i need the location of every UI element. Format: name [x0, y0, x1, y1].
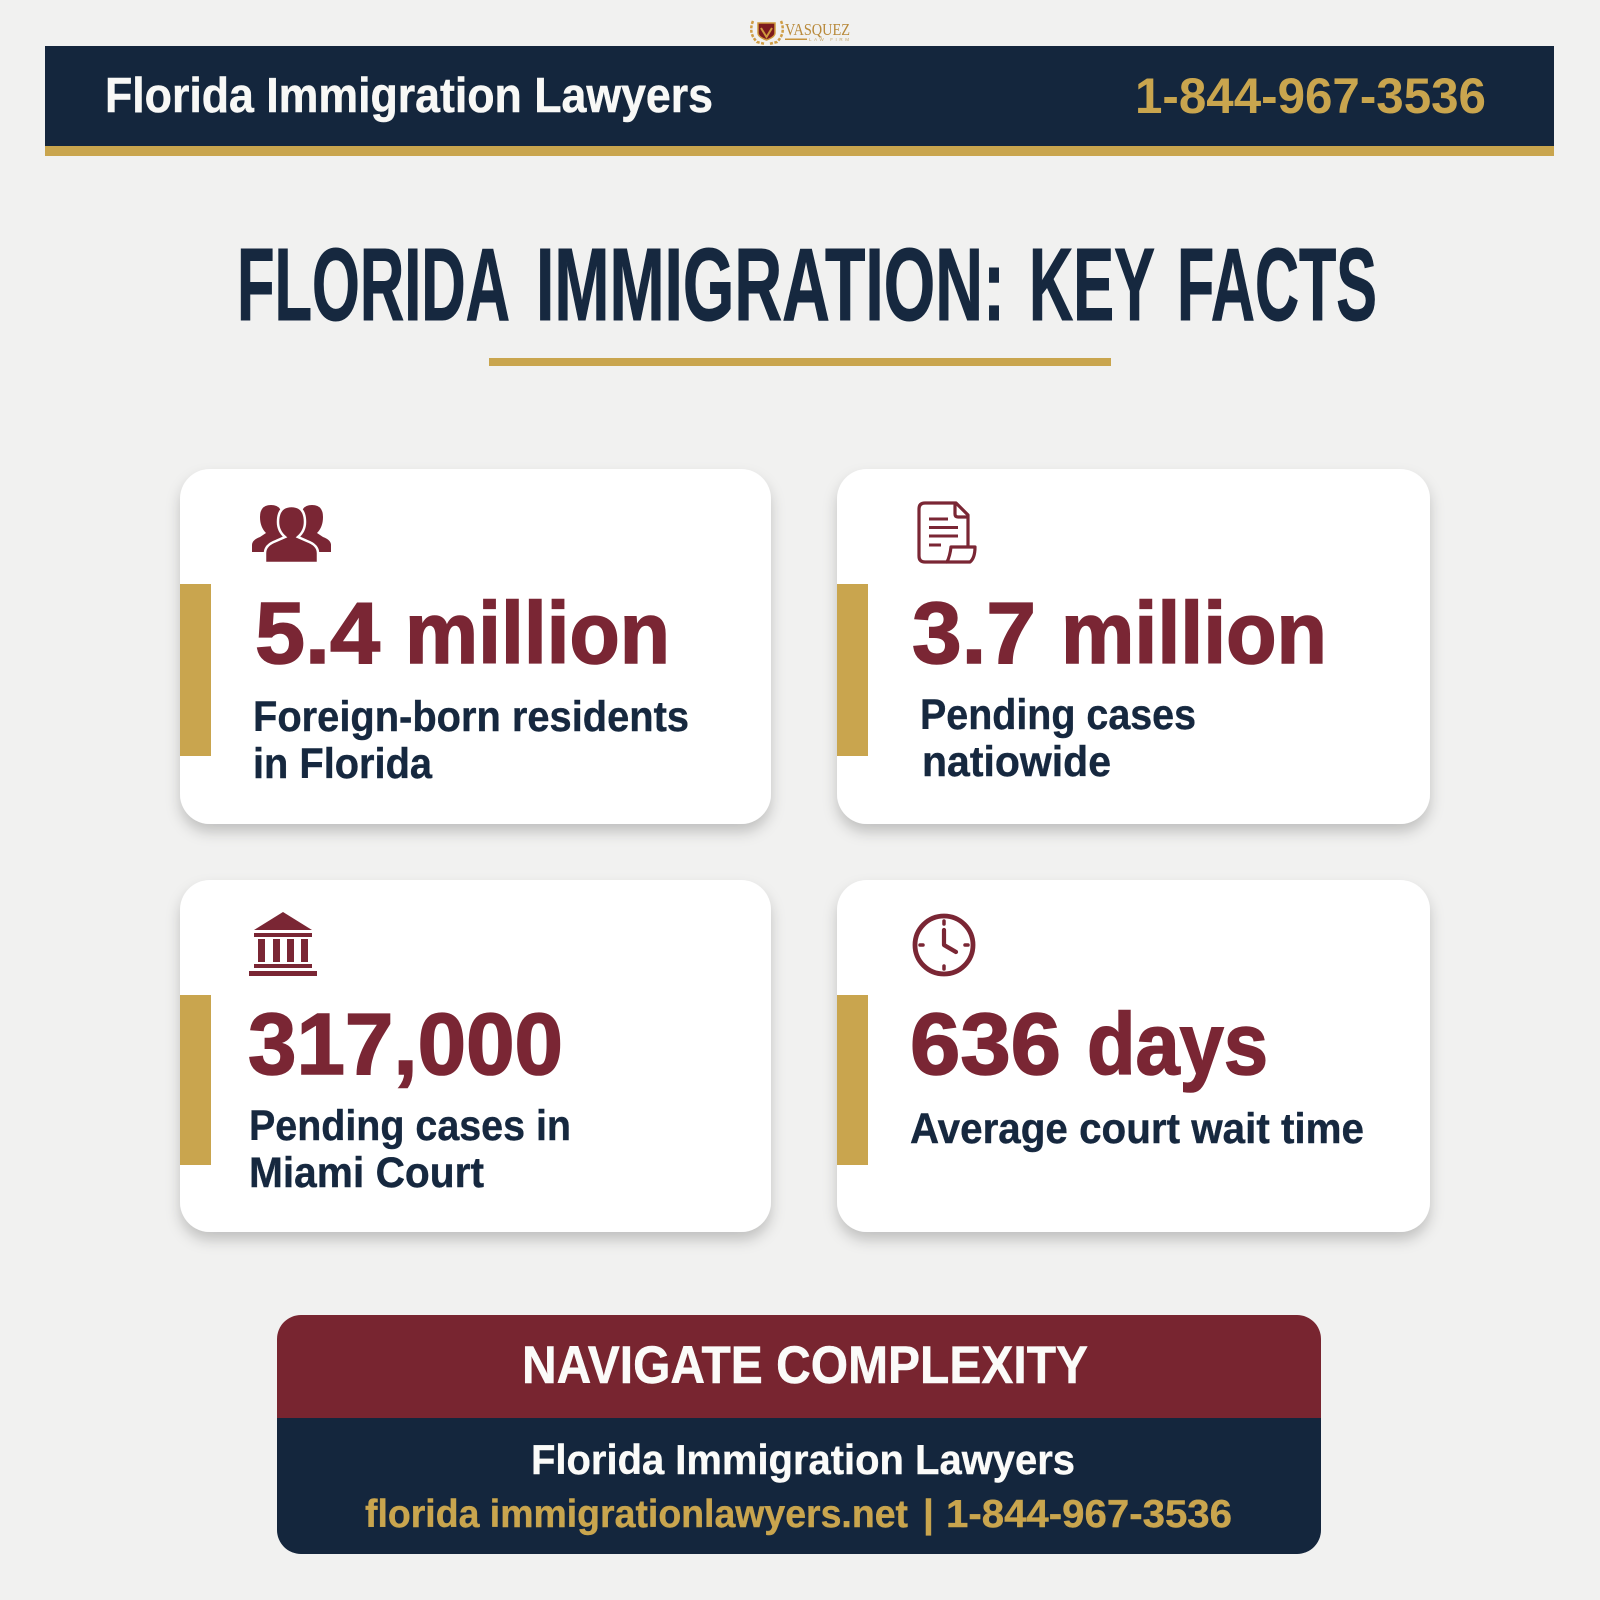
panel: foreign-born residents	[180, 469, 771, 824]
description	[253, 693, 689, 788]
panel: pending cases in Miami Court	[180, 880, 771, 1232]
description: Average court wait time	[910, 1105, 1364, 1153]
stat	[912, 585, 1327, 682]
description: Pending cases in	[249, 1102, 571, 1150]
title: KEY	[1029, 227, 1155, 342]
stat	[255, 585, 670, 682]
description: natiowide	[922, 738, 1111, 786]
stat: 636	[910, 996, 1061, 1093]
contact line	[365, 1493, 1232, 1536]
icon: courthouse	[249, 912, 317, 976]
panel: pending cases nationwide	[837, 469, 1430, 824]
header band	[45, 46, 1554, 156]
header firm name: Florida Immigration Lawyers	[105, 69, 713, 123]
title: IMMIGRATION:	[536, 227, 1005, 342]
description: Pending cases	[920, 691, 1196, 739]
logo: Vasquez Law	[751, 20, 850, 44]
logo: Vasquez Law: VASQUEZ	[785, 20, 850, 39]
stat: 5.4	[255, 585, 380, 682]
stat: 3.7	[912, 585, 1036, 682]
description: Miami Court	[249, 1149, 484, 1197]
stat: 317,000	[248, 996, 563, 1093]
stat: days	[1087, 996, 1268, 1093]
icon: clock	[915, 916, 973, 974]
title	[237, 227, 1377, 342]
stat: million	[1061, 585, 1327, 682]
title underline	[489, 358, 1111, 366]
logo: Vasquez Law: LAW FIRM	[809, 37, 849, 42]
call to action heading: NAVIGATE COMPLEXITY	[522, 1336, 1088, 1395]
description	[920, 691, 1196, 786]
description: Foreign-born residents	[253, 693, 689, 741]
header phone number: 1-844-967-3536	[1135, 68, 1486, 124]
description: in Florida	[253, 740, 433, 788]
stat: million	[405, 585, 670, 682]
contact line: |	[923, 1493, 934, 1536]
contact line: 1-844-967-3536	[946, 1493, 1232, 1536]
firm name: Florida Immigration Lawyers	[531, 1436, 1075, 1483]
contact line: florida immigrationlawyers.net	[365, 1493, 908, 1536]
stat	[910, 996, 1268, 1093]
description	[249, 1102, 571, 1197]
icon: people	[252, 505, 331, 563]
call to action panel	[277, 1315, 1321, 1554]
icon: document	[919, 503, 975, 562]
panel: average court wait time	[837, 880, 1430, 1232]
title: FLORIDA	[237, 227, 510, 342]
title: FACTS	[1177, 227, 1377, 342]
